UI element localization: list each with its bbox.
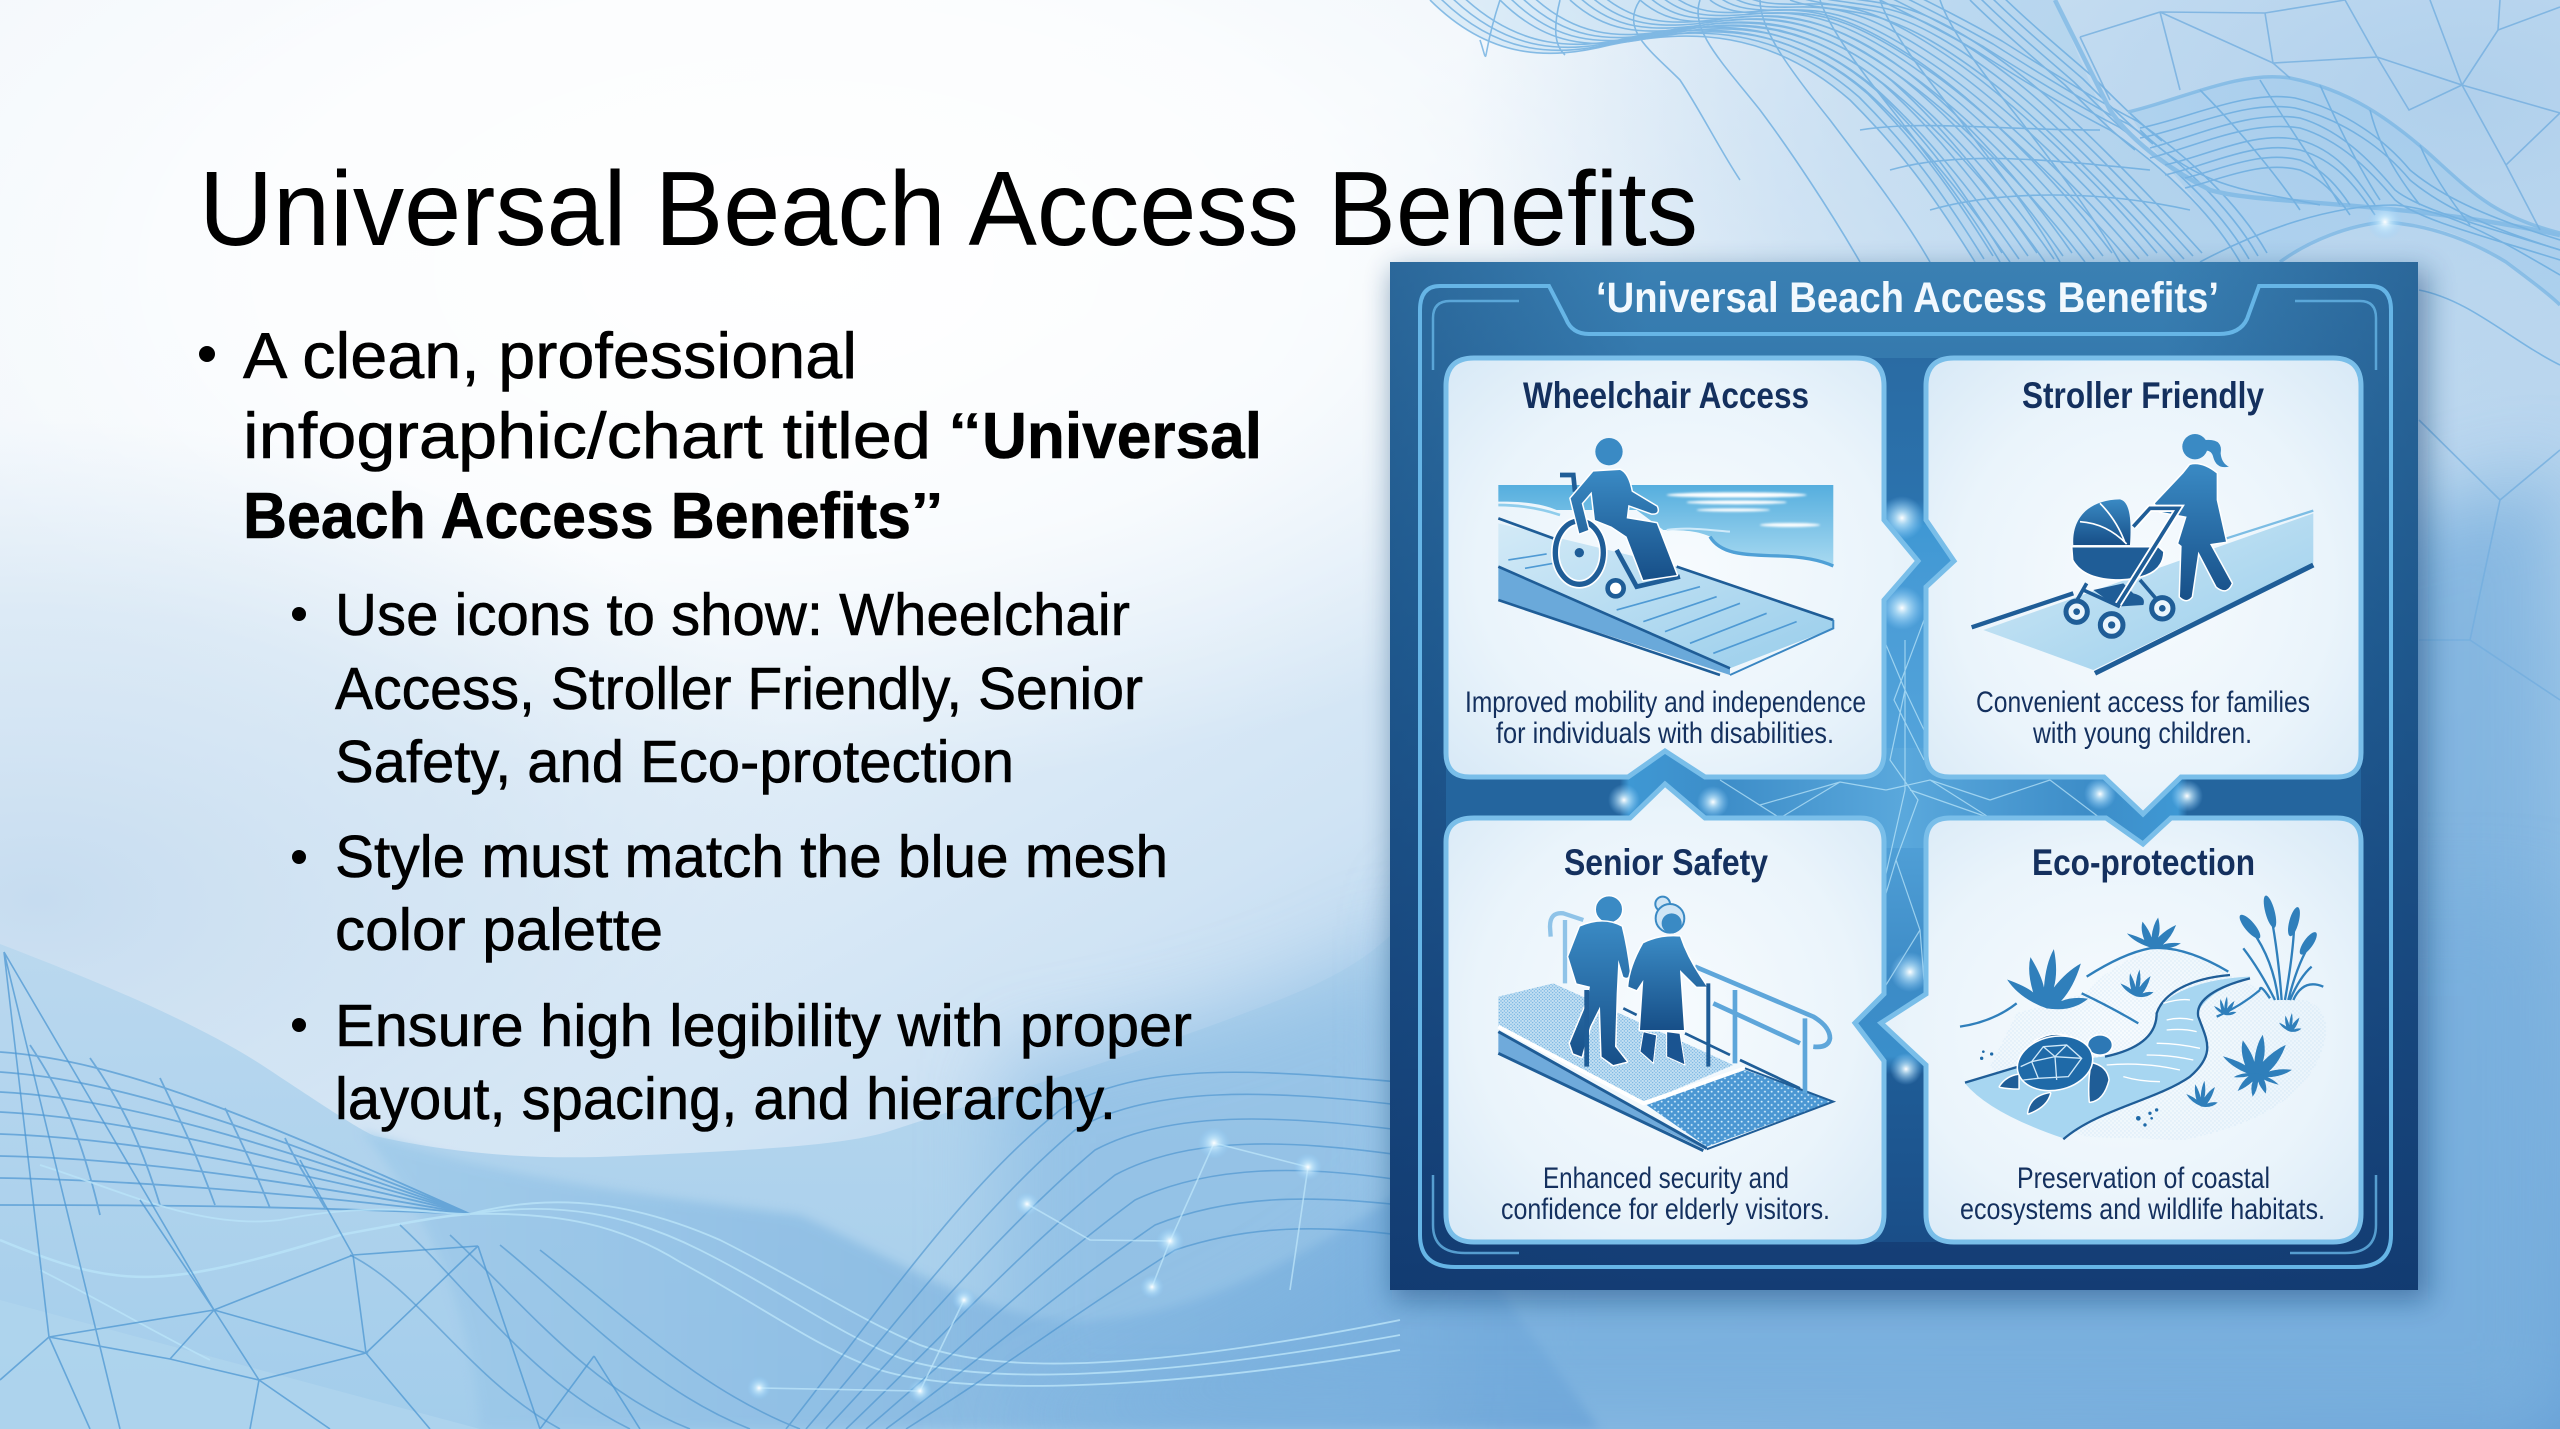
card: Stroller Friendly	[1926, 358, 2361, 814]
description: Convenient access for families	[1976, 686, 2310, 719]
sub bullet: icons: Use icons to show: Wheelchair	[335, 582, 1130, 648]
icon: seniors on accessible ramp	[1498, 896, 1833, 1151]
description	[1976, 686, 2310, 750]
card: Eco-protection	[1881, 818, 2361, 1242]
main bullet: infographic request: ”	[912, 479, 942, 552]
central glowing connector network	[1446, 358, 2361, 1242]
sub bullet: legibility: layout, spacing, and hierarchy.	[335, 1066, 1116, 1132]
sub bullet: style: color palette	[335, 897, 663, 963]
card: Senior Safety	[1446, 784, 1884, 1242]
description: with young children.	[2032, 717, 2252, 750]
description: Improved mobility and independence	[1465, 686, 1866, 719]
description	[1960, 1162, 2325, 1226]
description: for individuals with disabilities.	[1496, 717, 1834, 750]
main bullet: infographic request: “	[950, 399, 980, 472]
figure: sea turtle	[2000, 1030, 2112, 1113]
card heading: Wheelchair Access	[1523, 375, 1809, 416]
figure: senior woman	[1628, 897, 1708, 1067]
sub bullet: icons	[292, 582, 1143, 795]
card heading: Stroller Friendly	[2022, 375, 2264, 416]
decorative frame with title tab	[1420, 286, 2391, 1267]
card heading: Senior Safety	[1564, 842, 1768, 883]
sub bullet: style: Style must match the blue mesh	[335, 824, 1168, 890]
sub bullet: style	[292, 824, 1168, 963]
sub bullet: icons: Access, Stroller Friendly, Senior	[335, 656, 1143, 722]
main bullet: infographic request: Beach Access Benefits	[243, 479, 911, 552]
icon: person pushing stroller	[1972, 434, 2313, 673]
sub bullet: legibility	[292, 993, 1192, 1132]
icon: turtle, dunes, plants and stream	[1960, 894, 2327, 1140]
description: Enhanced security and	[1543, 1162, 1789, 1195]
card: Wheelchair Access	[1446, 358, 1918, 777]
main bullet: infographic request	[199, 319, 1262, 552]
infographic panel	[1390, 262, 2428, 1300]
main bullet: infographic request: infographic/chart titled	[243, 399, 931, 472]
bullet list	[199, 319, 1262, 1132]
main bullet: infographic request: A clean, professional	[243, 319, 857, 392]
icon: wheelchair user on beach ramp	[1498, 438, 1833, 675]
description: ecosystems and wildlife habitats.	[1960, 1193, 2325, 1226]
description: confidence for elderly visitors.	[1501, 1193, 1830, 1226]
main bullet: infographic request: Universal	[982, 399, 1262, 472]
card heading: Eco-protection	[2032, 842, 2255, 883]
figure: wheelchair user	[1555, 438, 1680, 596]
sub bullet: legibility: Ensure high legibility with proper	[335, 993, 1192, 1059]
slide title: Universal Beach Access Benefits	[199, 150, 1698, 268]
description	[1501, 1162, 1830, 1226]
description	[1465, 686, 1866, 750]
sub bullet: icons: Safety, and Eco-protection	[335, 729, 1014, 795]
description: Preservation of coastal	[2017, 1162, 2270, 1195]
panel heading: ‘Universal Beach Access Benefits’	[1596, 274, 2219, 322]
figure: senior man	[1568, 896, 1630, 1067]
